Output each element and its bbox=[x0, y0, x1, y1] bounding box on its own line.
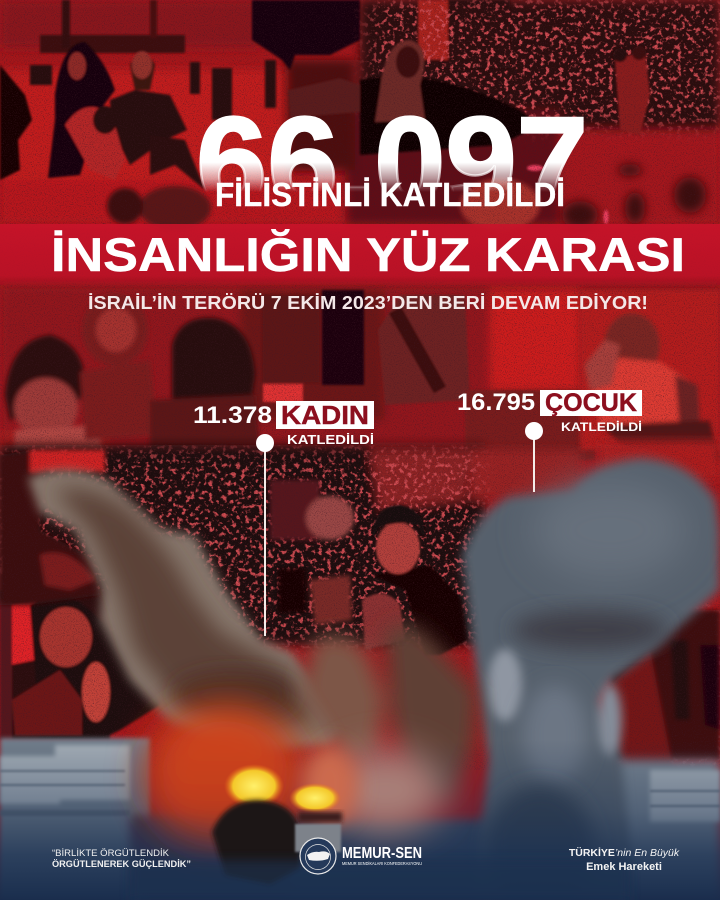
rubble field red flecks bbox=[0, 445, 490, 650]
callout: women killed bbox=[193, 400, 374, 636]
figure: 16.795: 16.795 bbox=[457, 389, 535, 416]
label box: ÇOCUK: ÇOCUK bbox=[545, 389, 637, 417]
marker dot: women bbox=[256, 434, 274, 452]
red banner strip bbox=[0, 224, 720, 285]
fire at the explosion core bbox=[212, 764, 342, 884]
label box: KADIN: KADIN bbox=[281, 400, 369, 430]
title number: 66.097: 66.097 bbox=[196, 91, 588, 234]
tree and buildings on top bbox=[40, 0, 510, 70]
footer slogan left: “BİRLİKTE ÖRGÜTLENDİK bbox=[52, 848, 170, 859]
footer slogan right: Emek Hareketi bbox=[586, 861, 662, 873]
middle band base bbox=[0, 285, 720, 460]
bottom navy fade bbox=[0, 740, 720, 900]
silhouettes and rubble right bbox=[605, 610, 720, 790]
top band tones bbox=[0, 0, 720, 225]
connector line: women bbox=[264, 443, 266, 636]
grey smoke plume right bbox=[462, 458, 720, 900]
footer slogan right bbox=[569, 846, 680, 873]
crying child mid-right bbox=[580, 290, 720, 465]
logo wordmark: MEMUR SENDİKALARI KONFEDERASYONU bbox=[342, 860, 422, 866]
dark smudges right bbox=[562, 164, 706, 229]
dark collage panels bbox=[262, 290, 595, 460]
boy in rubble bbox=[362, 505, 468, 655]
marker dot: children bbox=[525, 422, 543, 440]
building shadow bands bbox=[0, 770, 720, 816]
orange explosion glow bbox=[145, 703, 445, 847]
sacks in foreground bbox=[107, 179, 540, 231]
connector line: children bbox=[533, 431, 535, 492]
pink light spots bbox=[527, 165, 608, 224]
rubble red flecks bbox=[354, 0, 720, 138]
car and woman in headscarf top center bbox=[288, 40, 540, 155]
figure: 11.378: 11.378 bbox=[193, 402, 272, 429]
logo wordmark: MEMUR-SEN bbox=[342, 845, 422, 862]
rubble field bbox=[0, 440, 720, 645]
family fleeing top-left bbox=[0, 42, 205, 190]
callout: children killed bbox=[457, 389, 642, 492]
children faces mid-left bbox=[5, 294, 260, 470]
caption: katledildi: KATLEDİLDİ bbox=[287, 432, 374, 447]
brown smoke plume left bbox=[28, 470, 345, 755]
footer slogan right: TÜRKİYE’nin En Büyük bbox=[569, 846, 680, 859]
headline: İnsanlığın yüz karası: İNSANLIĞIN YÜZ KARASI bbox=[51, 228, 685, 281]
brown smoke columns center bbox=[300, 624, 478, 800]
tagline: İSRAİL’İN TERÖRÜ 7 EKİM 2023’DEN BERİ DEVAM EDİYOR! bbox=[88, 293, 648, 313]
city skyline at the bottom bbox=[0, 738, 720, 900]
footer slogan left: ÖRGÜTLENEREK GÜÇLENDİK” bbox=[52, 859, 191, 870]
small crowd top-left bbox=[30, 60, 276, 120]
logo wordmark bbox=[342, 845, 422, 866]
upper-left dark figure bbox=[0, 450, 105, 605]
caption: katledildi: KATLEDİLDİ bbox=[561, 419, 642, 434]
mother and child bottom-left bbox=[0, 590, 160, 740]
children on rubble top-right bbox=[613, 46, 650, 135]
rubble objects bbox=[270, 480, 354, 625]
lower navy veil bbox=[130, 860, 630, 900]
subtitle: Filistinli katledildi: FİLİSTİNLİ KATLEDİLDİ bbox=[215, 176, 565, 213]
footer slogan left bbox=[52, 848, 191, 870]
logo: Memur-Sen emblem bbox=[300, 838, 336, 874]
